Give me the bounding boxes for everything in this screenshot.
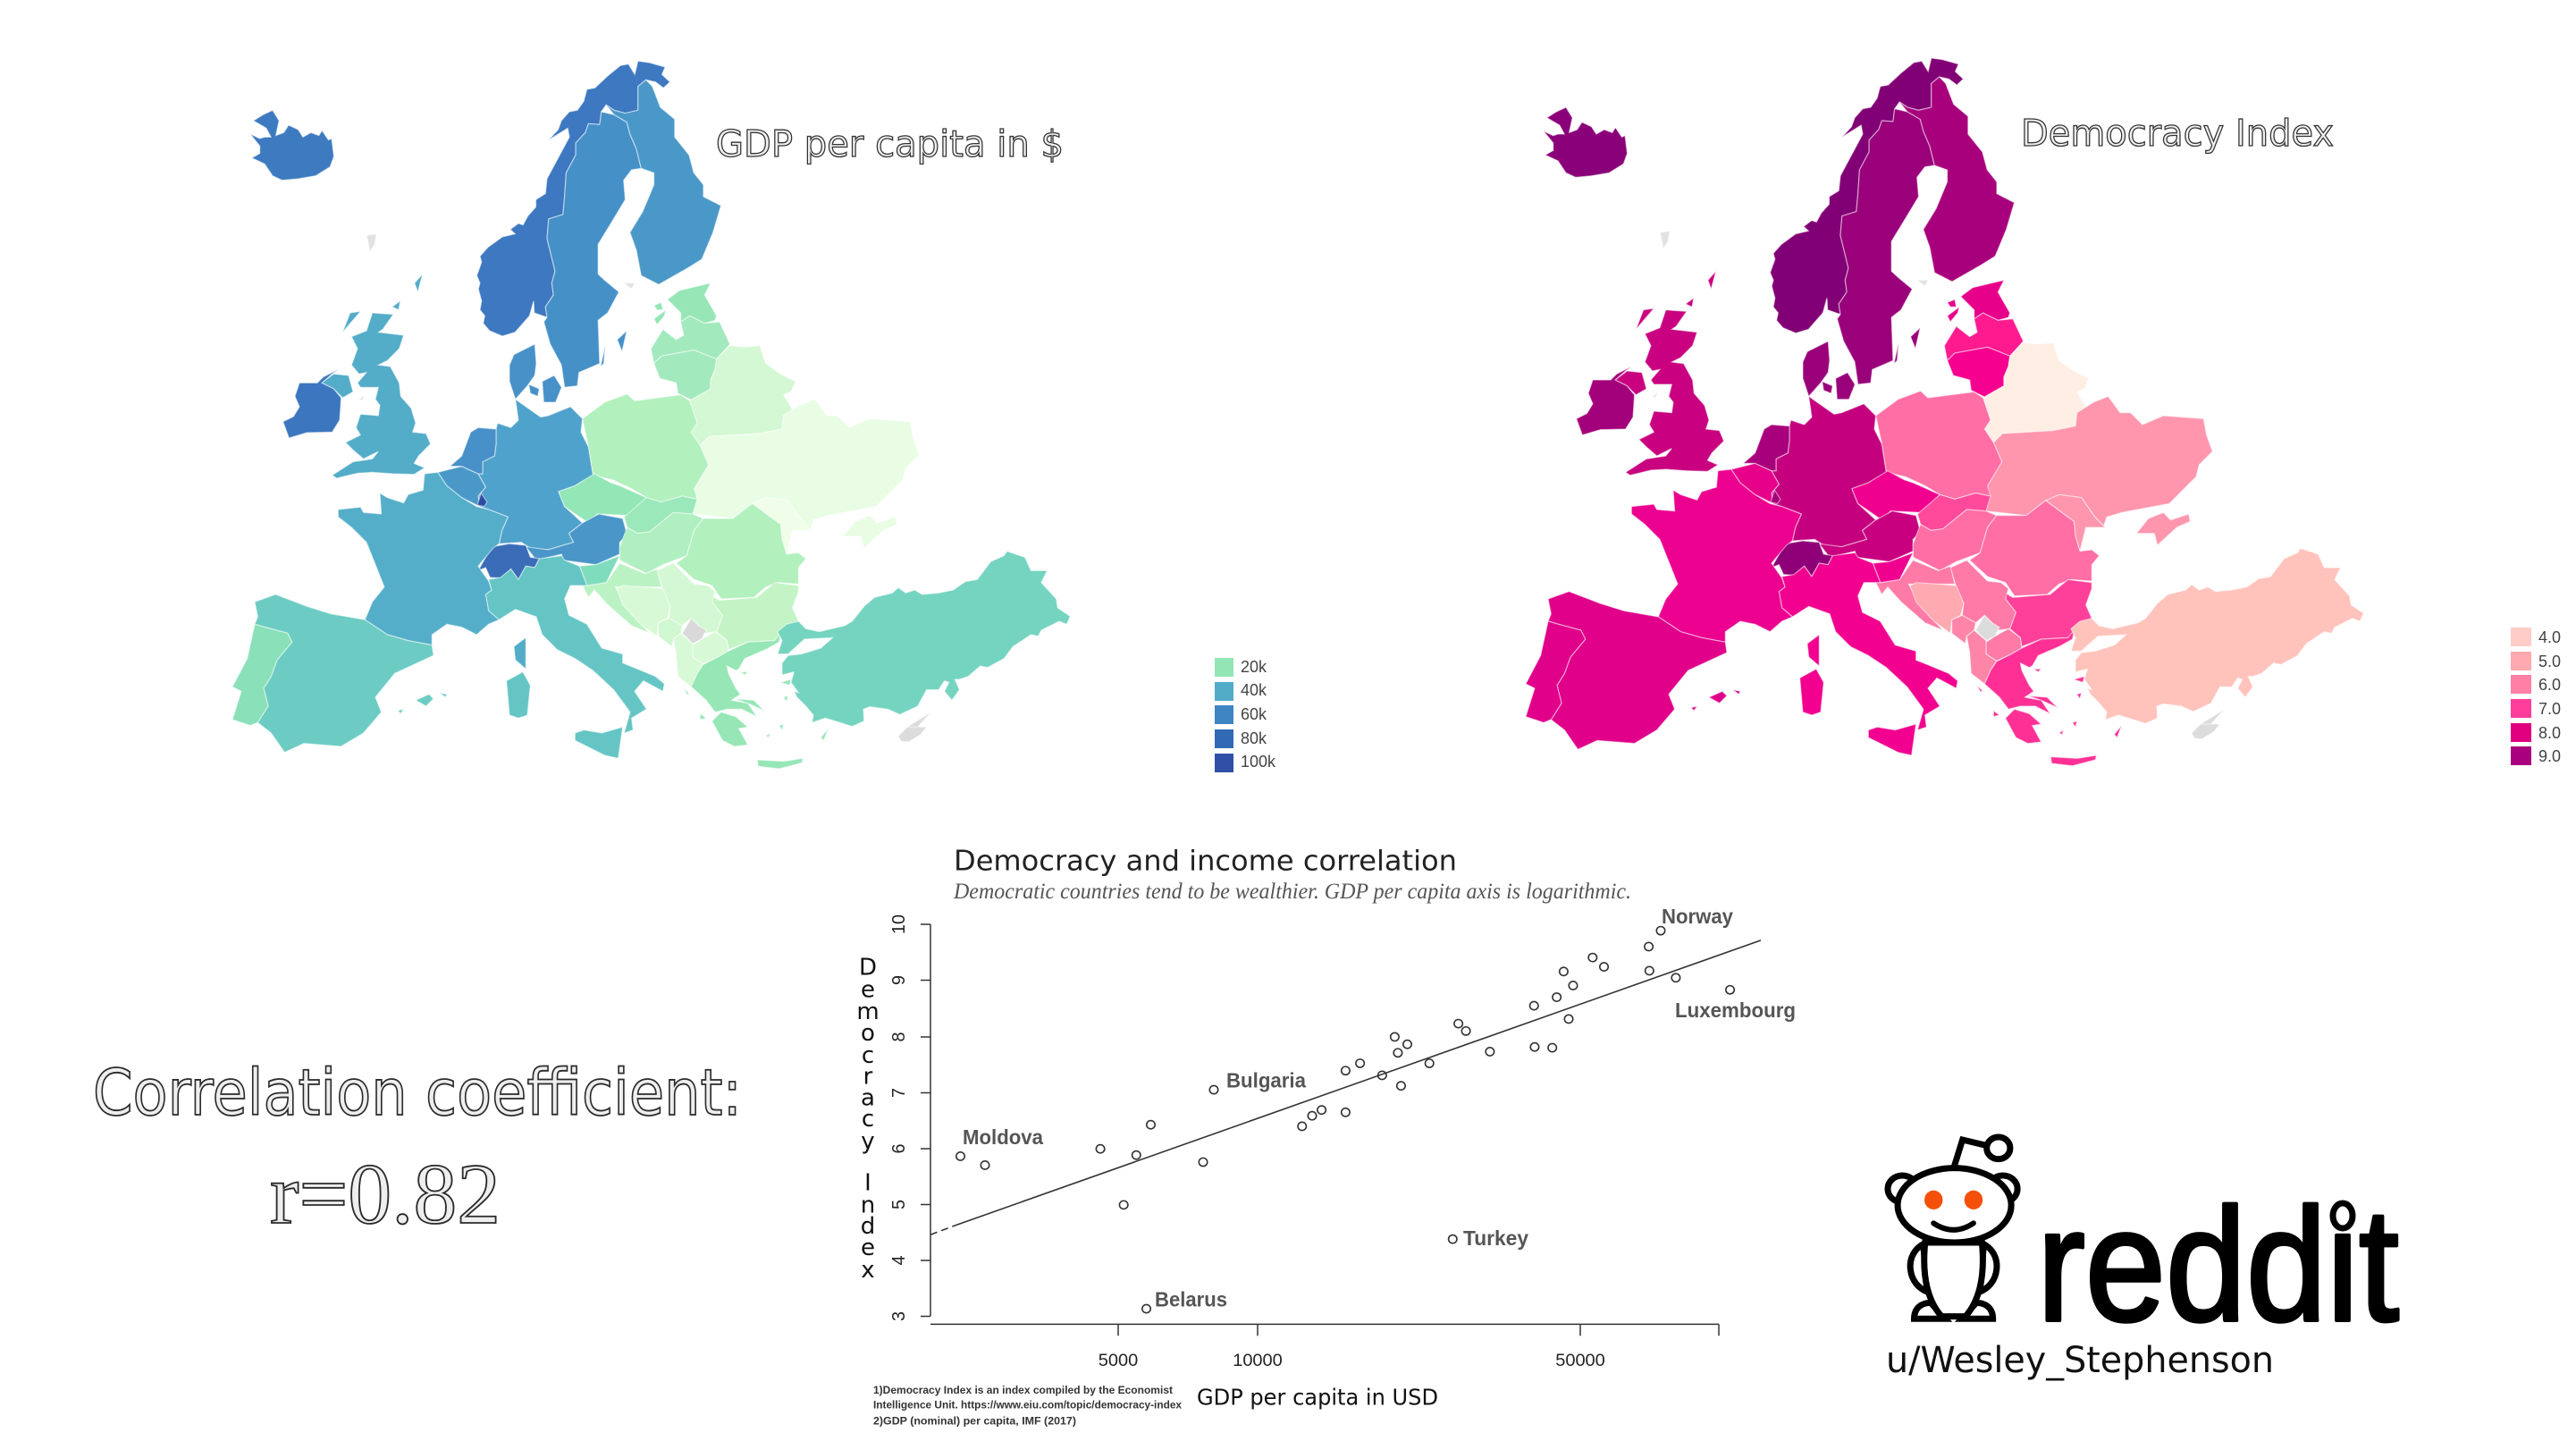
legend: GDP per capita: 100k (1241, 753, 1276, 771)
y axis title: c (862, 1042, 874, 1069)
y axis title: a (861, 1084, 875, 1111)
country labels: Bulgaria (1226, 1069, 1306, 1092)
country labels: Moldova (963, 1125, 1043, 1149)
y axis title: m (856, 999, 880, 1025)
text block: correlation coefficient (93, 1056, 742, 1242)
y axis title: o (861, 1020, 875, 1047)
regression line (930, 940, 1761, 1235)
legend: GDP per capita: 80k (1241, 729, 1267, 747)
legend: GDP per capita: 60k (1241, 705, 1267, 723)
y axis title: y (861, 1128, 875, 1155)
y axis title: d (861, 1213, 875, 1240)
y axis (921, 924, 930, 1316)
footnotes: 2)GDP (nominal) per capita, IMF (2017) (873, 1415, 1076, 1427)
y axis tick labels: 8 (889, 1032, 909, 1042)
y axis title: e (861, 1235, 875, 1261)
footnotes (873, 1384, 1182, 1427)
data points (956, 927, 1734, 1313)
y axis title: r (863, 1064, 873, 1091)
chart title: Democracy and income correlation (954, 846, 1457, 877)
value: r=0.82: r=0.82 (270, 1146, 501, 1242)
y axis tick labels: 9 (889, 975, 909, 985)
y axis tick labels: 10 (889, 914, 909, 934)
y axis title: c (862, 1106, 874, 1133)
scatter chart: democracy and income correlation (856, 846, 1796, 1427)
x axis tick labels (1099, 1351, 1605, 1370)
country labels: Turkey (1463, 1226, 1528, 1250)
legend: Democracy Index (2511, 628, 2561, 765)
legend: Democracy Index: 5.0 (2538, 653, 2561, 670)
y axis tick labels: 7 (889, 1088, 909, 1098)
x axis tick labels: 10000 (1233, 1351, 1283, 1370)
map: GDP per capita in Europe (232, 61, 1070, 769)
y axis tick labels (889, 914, 909, 1321)
credit: username: u/Wesley_Stephenson (1886, 1340, 2274, 1381)
legend: GDP per capita: 20k (1241, 658, 1267, 676)
chart subtitle: Democratic countries tend to be wealthier. GDP per capita axis is logarithmic. (953, 880, 1631, 904)
y axis tick labels: 5 (889, 1200, 909, 1209)
x axis tick labels: 5000 (1099, 1351, 1138, 1370)
legend: Democracy Index: 6.0 (2538, 676, 2561, 694)
footnotes: Intelligence Unit. https://www.eiu.com/topic/democracy-index (873, 1399, 1182, 1412)
y axis title: n (861, 1192, 875, 1218)
x axis (930, 1324, 1719, 1336)
x axis title: GDP per capita in USD (1197, 1385, 1438, 1411)
legend: Democracy Index: 8.0 (2538, 724, 2561, 742)
footnotes: 1)Democracy Index is an index compiled by the Economist (873, 1384, 1173, 1396)
map: Democracy Index in Europe (1526, 58, 2363, 766)
legend: Democracy Index: 9.0 (2538, 747, 2561, 765)
logo: reddit wordmark: reddit (2037, 1176, 2399, 1355)
y axis title: I (864, 1170, 871, 1197)
legend: Democracy Index: 7.0 (2538, 700, 2561, 718)
y axis title: x (861, 1257, 875, 1284)
y axis title: D (859, 955, 877, 982)
y axis tick labels: 6 (889, 1143, 909, 1154)
legend: GDP per capita: 40k (1241, 681, 1267, 699)
logo: reddit alien mascot (1888, 1137, 2017, 1319)
legend: Democracy Index: 4.0 (2538, 628, 2561, 646)
y axis tick labels: 3 (889, 1311, 909, 1321)
legend: GDP per capita (1215, 658, 1276, 772)
y axis title (856, 955, 880, 1284)
country labels: Belarus (1155, 1288, 1227, 1311)
country labels: Norway (1662, 905, 1733, 928)
label: Correlation coefficient: Correlation coefficient: (93, 1056, 742, 1130)
country labels (963, 905, 1796, 1311)
y axis tick labels: 4 (889, 1255, 909, 1265)
heading: Democracy Index: Democracy Index (2021, 112, 2334, 155)
x axis tick labels: 50000 (1555, 1351, 1605, 1370)
country labels: Luxembourg (1675, 999, 1796, 1022)
y axis title: e (861, 976, 875, 1003)
heading: GDP per capita in $: GDP per capita in $ (716, 122, 1064, 165)
